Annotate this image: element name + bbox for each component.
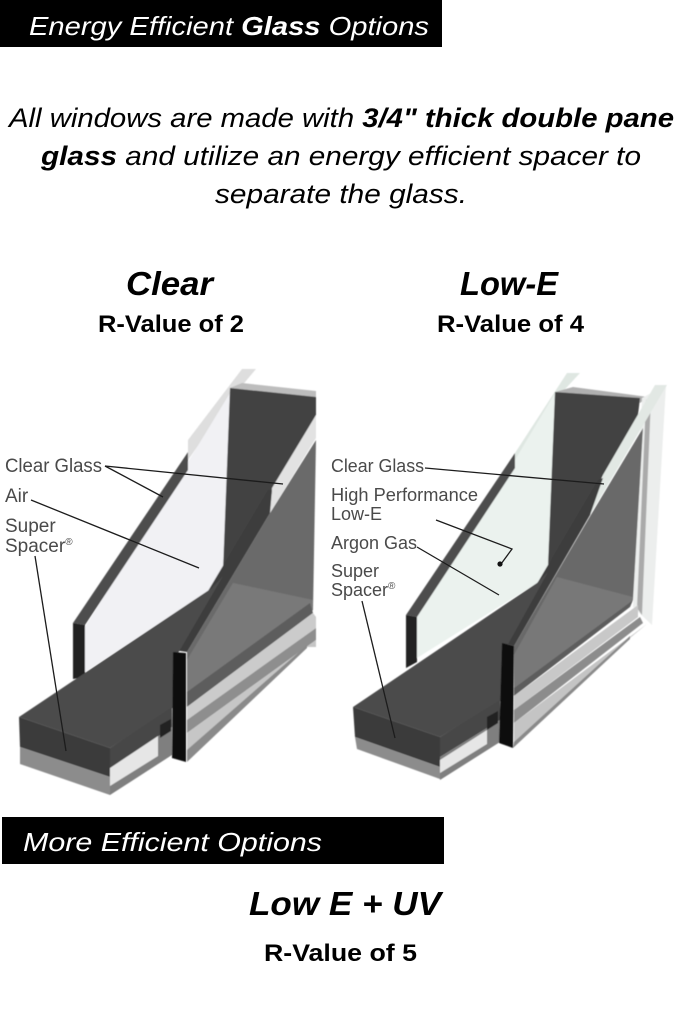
labels: clear diagram: Air — [5, 486, 29, 507]
labels: low-e diagram: Super — [331, 561, 379, 581]
intro paragraph: separate the glass. — [215, 179, 467, 209]
intro paragraph — [7, 103, 674, 209]
labels: low-e diagram — [331, 456, 478, 600]
labels: clear diagram: ® — [65, 537, 73, 548]
labels: clear diagram: Super — [5, 516, 56, 537]
labels: low-e diagram: High Performance — [331, 485, 478, 505]
section bar: more options — [2, 817, 444, 864]
diagram: clear double pane cross-section — [5, 369, 316, 795]
heading: low e plus uv — [249, 885, 444, 967]
heading: clear glass: Clear — [126, 265, 215, 302]
heading: low-e glass — [437, 265, 585, 338]
heading: low-e glass: Low-E — [460, 265, 559, 302]
labels: clear diagram: Clear Glass — [5, 456, 102, 477]
heading: clear glass — [98, 265, 244, 338]
leader lines: clear diagram — [31, 466, 283, 751]
labels: clear diagram — [5, 456, 102, 557]
labels: clear diagram: Spacer — [5, 536, 65, 557]
labels: low-e diagram: Low-E — [331, 504, 382, 524]
heading: low e plus uv: R-Value of 5 — [264, 940, 417, 967]
labels: low-e diagram: Argon Gas — [331, 533, 417, 553]
labels: low-e diagram: Spacer — [331, 580, 388, 600]
intro paragraph: All windows are made with 3/4" thick double pane — [7, 103, 674, 133]
section bar: more options: More Efficient Options — [23, 827, 322, 857]
leader lines: low-e diagram — [362, 468, 604, 738]
diagram: low-e double pane cross-section — [331, 373, 667, 780]
labels: low-e diagram: Clear Glass — [331, 456, 424, 476]
intro paragraph: glass and utilize an energy efficient spacer to — [40, 141, 641, 171]
heading: clear glass: R-Value of 2 — [98, 311, 244, 338]
header bar: glass options: Energy Efficient Glass Options — [29, 11, 429, 41]
labels: low-e diagram: ® — [388, 581, 396, 592]
header bar: glass options — [0, 0, 442, 47]
heading: low e plus uv: Low E + UV — [249, 885, 444, 922]
heading: low-e glass: R-Value of 4 — [437, 311, 585, 338]
